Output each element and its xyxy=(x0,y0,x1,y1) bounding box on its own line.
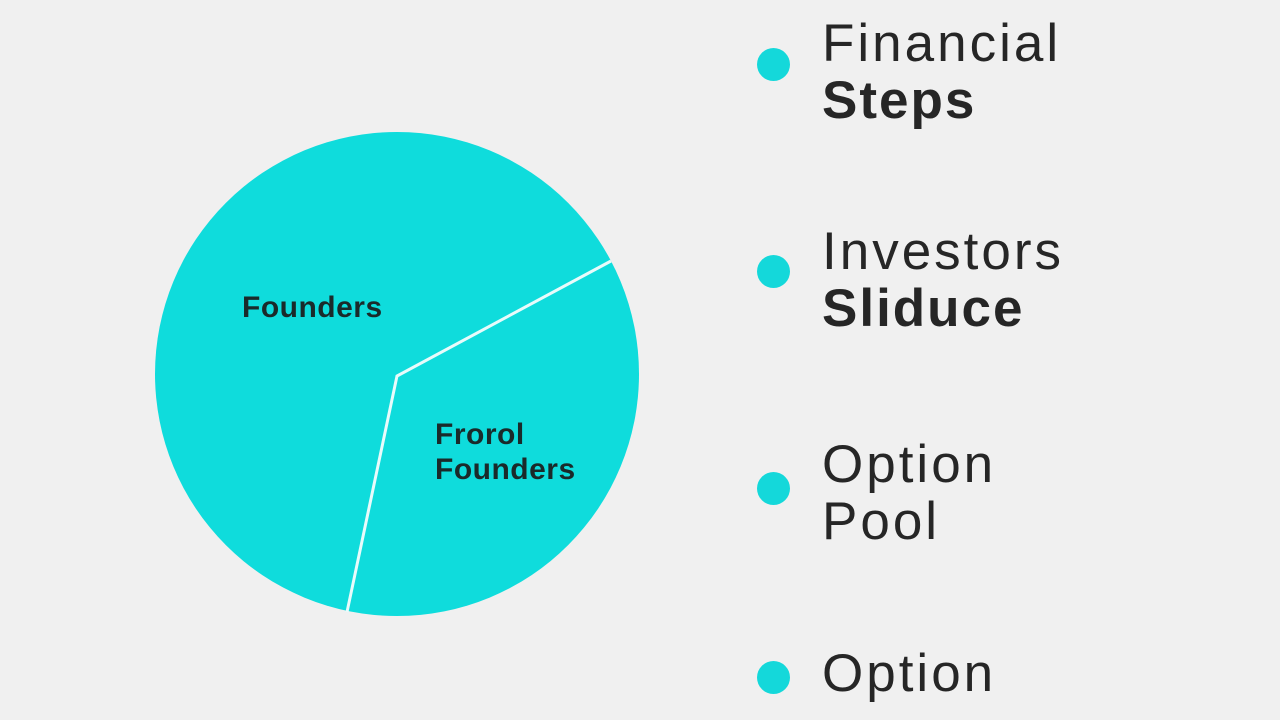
text: Financial Steps: Steps xyxy=(822,71,976,130)
icon: dot xyxy=(757,472,790,505)
text: Financial Steps: Financial xyxy=(822,14,1061,73)
label: Frorol Founders: Founders xyxy=(435,453,576,486)
text: Option: Option xyxy=(822,644,996,703)
legend item 1 xyxy=(757,14,1061,130)
label: Founders: Founders xyxy=(242,291,383,324)
text: Financial Steps xyxy=(822,14,1061,130)
legend item 4 xyxy=(757,644,996,703)
pie slice: Founders (large) xyxy=(155,132,639,616)
text: Investors Sliduce xyxy=(822,222,1064,338)
text: Option Pool: Option xyxy=(822,435,996,494)
icon: dot xyxy=(757,255,790,288)
icon: dot xyxy=(757,48,790,81)
text: Option Pool xyxy=(822,435,996,551)
icon: dot xyxy=(757,661,790,694)
slice divider lines xyxy=(347,261,611,612)
text: Option Pool: Pool xyxy=(822,492,940,551)
text: Investors Sliduce: Investors xyxy=(822,222,1064,281)
legend item 2 xyxy=(757,222,1064,338)
label: Frorol Founders: Frorol xyxy=(435,418,525,451)
text: Investors Sliduce: Sliduce xyxy=(822,279,1025,338)
legend item 3 xyxy=(757,435,996,551)
